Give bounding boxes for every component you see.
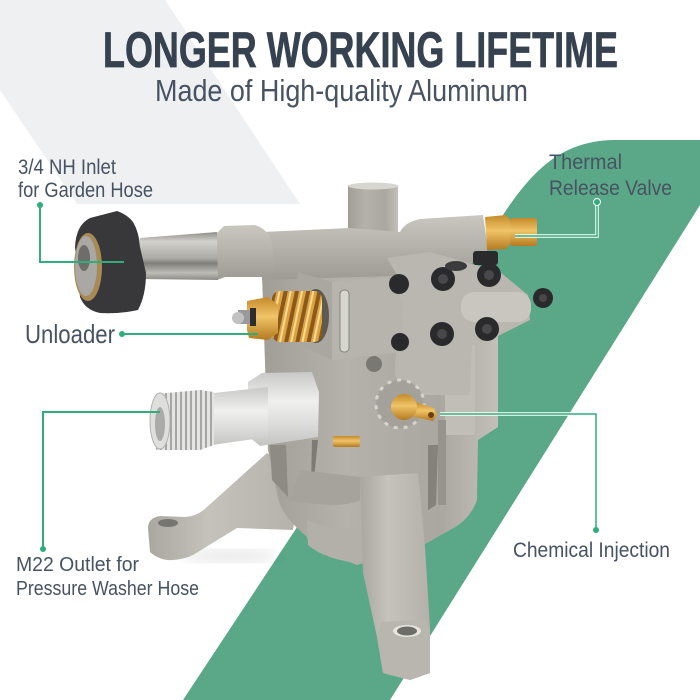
casing ribs — [270, 345, 475, 510]
callout: chemical injection: Chemical Injection — [513, 539, 670, 562]
callout: 3/4 NH inlet — [18, 156, 153, 262]
callout: thermal release valve: Release Valve — [549, 177, 672, 200]
callout: thermal release valve: Thermal — [549, 151, 622, 174]
callout: unloader: Unloader — [25, 319, 115, 349]
callout: 3/4 NH inlet: 3/4 NH Inlet — [18, 156, 116, 179]
pump bottom cap — [307, 520, 364, 564]
chemical injection brass fitting — [391, 394, 437, 421]
unloader block — [290, 272, 403, 360]
pump right mounting leg — [360, 473, 430, 680]
chemical injection gear ring — [376, 380, 424, 428]
outlet port hex fitting — [248, 372, 319, 446]
callout: chemical injection — [440, 414, 670, 562]
central valve block — [387, 252, 530, 395]
callout: M22 outlet: Pressure Washer Hose — [16, 578, 199, 600]
pump main casing — [262, 262, 498, 565]
black socket bolts — [366, 251, 553, 372]
ground shadow — [180, 550, 280, 562]
unloader spring — [272, 289, 329, 343]
outlet tube — [205, 387, 268, 446]
background: green diagonal band — [183, 140, 700, 700]
pump top cylinder port — [348, 182, 398, 245]
right pressure arm — [461, 292, 531, 322]
small brass plug — [333, 436, 360, 447]
unloader end bolt — [232, 308, 256, 326]
callout: thermal release valve — [515, 151, 672, 236]
M22 threaded outlet — [150, 390, 214, 450]
background: light gray parallelogram — [0, 0, 300, 204]
pump left mounting leg — [148, 453, 300, 560]
pressure washer pump — [74, 182, 553, 680]
unloader brass nut — [247, 297, 278, 340]
upper housing — [262, 215, 488, 280]
callout: M22 outlet: M22 Outlet for — [16, 554, 139, 576]
callout: 3/4 NH inlet: for Garden Hose — [18, 179, 153, 202]
callout: unloader — [25, 319, 258, 349]
thermal release valve — [485, 215, 537, 250]
garden hose knob — [74, 211, 146, 313]
callout: M22 outlet — [16, 412, 199, 600]
inlet collar — [217, 225, 275, 280]
subtitle: Made of High-quality Aluminum — [155, 73, 528, 108]
inlet tube — [140, 232, 218, 280]
